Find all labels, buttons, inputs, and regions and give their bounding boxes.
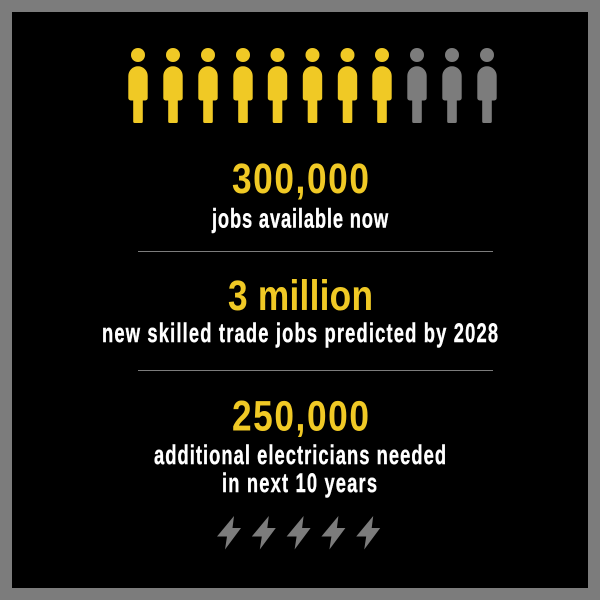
text: new skilled trade jobs: new skilled trade jobs predicted by 2028 <box>102 317 498 348</box>
icon: highlighted people <box>128 48 392 123</box>
stat: 300,000: 300,000 <box>232 155 369 203</box>
icon: grey people <box>407 48 497 123</box>
text: additional electricians needed: additional electricians needed <box>154 439 446 470</box>
stat: 3 million: 3 million <box>228 272 373 320</box>
icon row: lightning bolts <box>217 516 380 550</box>
text: jobs available now: jobs available now <box>211 203 388 233</box>
icon row: people, 8 of 11 highlighted <box>128 48 497 123</box>
text: in next 10 years: in next 10 years <box>222 467 377 498</box>
stat: 250,000: 250,000 <box>232 392 369 440</box>
